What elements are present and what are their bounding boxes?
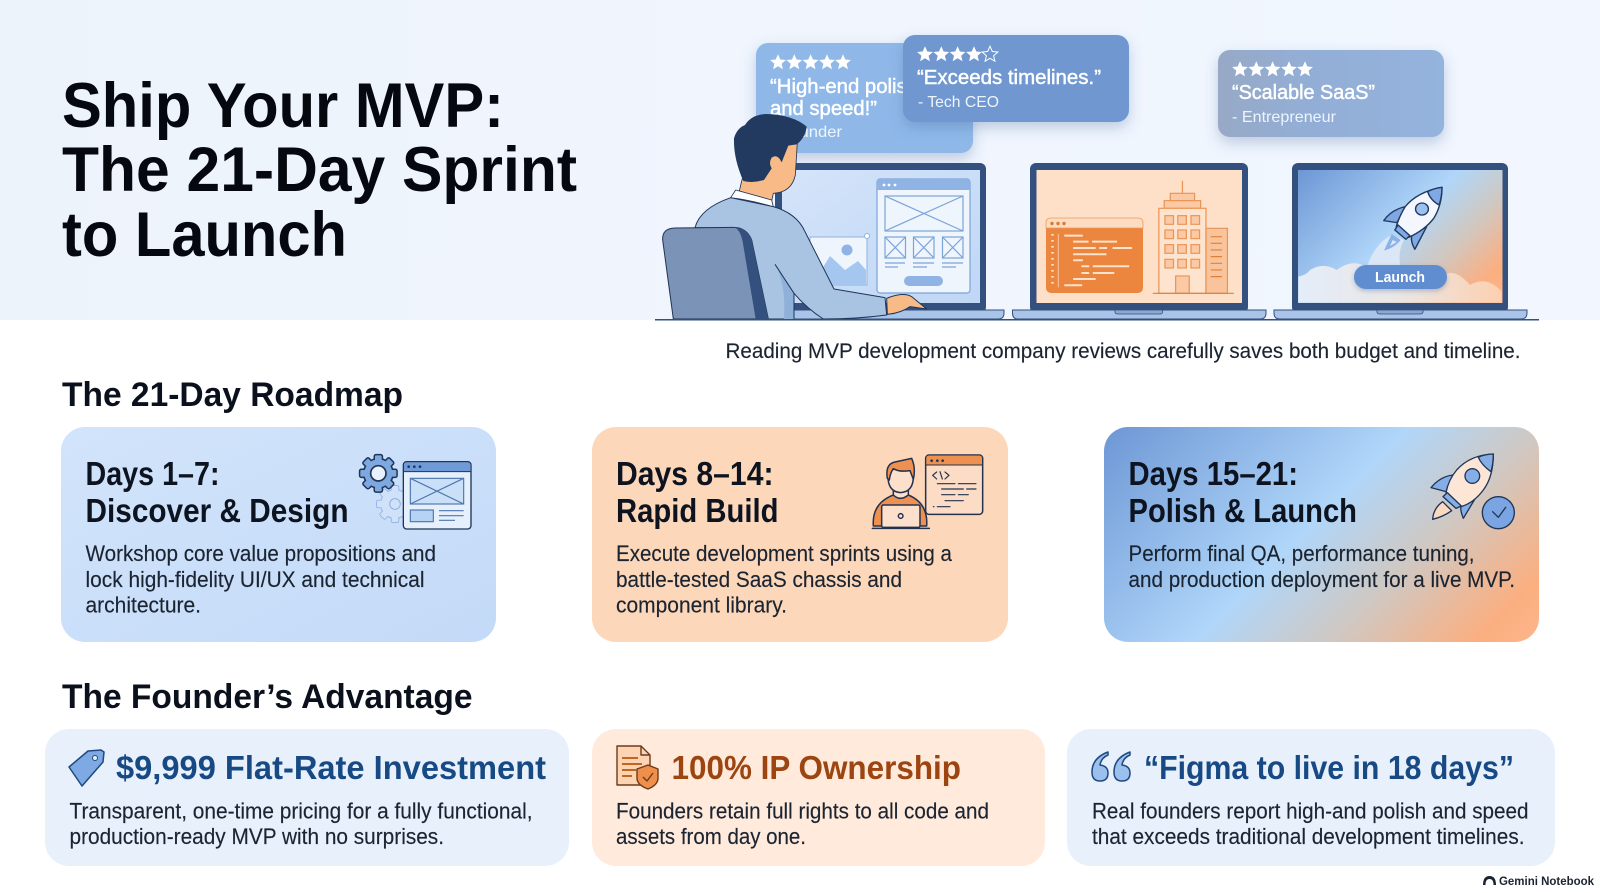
body text: component library. bbox=[616, 592, 787, 618]
body text: battle-tested SaaS chassis and bbox=[616, 567, 902, 592]
body text: lock high-fidelity UI/UX and technical bbox=[86, 567, 424, 592]
title: to Launch bbox=[62, 200, 347, 270]
body text bbox=[1092, 798, 1528, 849]
icon: developer with code window bbox=[872, 455, 983, 528]
ground line bbox=[655, 319, 1539, 320]
heading: 100% IP Ownership bbox=[672, 749, 961, 786]
body text: production-ready MVP with no surprises. bbox=[70, 824, 444, 849]
heading bbox=[616, 455, 778, 529]
review card: scalable SaaS bbox=[1218, 50, 1444, 137]
watermark: Gemini Notebook: Gemini Notebook bbox=[1499, 874, 1594, 888]
review card: exceeds timelines bbox=[903, 35, 1129, 122]
laptop 2: code and building bbox=[1012, 163, 1266, 319]
heading: “Figma to live in 18 days” bbox=[1144, 749, 1514, 786]
heading: Rapid Build bbox=[616, 492, 778, 529]
review card: high-end polish bbox=[756, 43, 973, 153]
review card: scalable SaaS: - Entrepreneur bbox=[1232, 109, 1337, 126]
panel: flat-rate investment bbox=[45, 729, 569, 866]
body text: Workshop core value propositions and bbox=[86, 541, 436, 566]
chair bbox=[663, 227, 768, 319]
body text bbox=[1128, 541, 1515, 592]
hand bbox=[887, 295, 927, 314]
heading bbox=[1128, 455, 1357, 529]
body text: that exceeds traditional development timelines. bbox=[1092, 824, 1524, 849]
body text: and production deployment for a live MVP. bbox=[1128, 567, 1515, 592]
code window bbox=[1046, 218, 1143, 293]
body text: Perform final QA, performance tuning, bbox=[1128, 541, 1474, 566]
panel: days 8-14 bbox=[592, 427, 1008, 642]
body text: assets from day one. bbox=[616, 824, 806, 849]
hero background bbox=[0, 0, 1600, 320]
person at desk bbox=[663, 114, 927, 319]
review card: high-end polish: and speed!” bbox=[770, 98, 877, 120]
body text bbox=[70, 798, 532, 849]
title bbox=[62, 71, 577, 270]
review card: exceeds timelines: “Exceeds timelines.” bbox=[917, 67, 1101, 89]
launch button bbox=[1354, 265, 1447, 289]
icon: rocket with check badge bbox=[1431, 454, 1514, 529]
body text bbox=[616, 541, 953, 618]
heading bbox=[86, 455, 348, 529]
heading: Discover & Design bbox=[86, 492, 348, 529]
section heading: roadmap: The 21-Day Roadmap bbox=[62, 376, 403, 414]
review card: high-end polish: - Founder bbox=[770, 124, 843, 141]
heading: Days 15–21: bbox=[1128, 455, 1298, 492]
clouds and smoke plume bbox=[1298, 234, 1502, 303]
heading: Days 8–14: bbox=[616, 455, 774, 492]
laptop 3: launch bbox=[1274, 163, 1527, 319]
title: Ship Your MVP: bbox=[62, 71, 504, 141]
body text: architecture. bbox=[86, 592, 201, 618]
office building bbox=[1153, 181, 1234, 293]
section heading: advantage: The Founder’s Advantage bbox=[62, 678, 472, 716]
head and neck bbox=[739, 130, 797, 201]
heading: Days 1–7: bbox=[86, 455, 220, 492]
body text: Transparent, one-time pricing for a fully functional, bbox=[70, 798, 532, 824]
review card: high-end polish: “High-end polish bbox=[770, 76, 918, 98]
torso and arm bbox=[695, 198, 887, 319]
body text bbox=[86, 541, 436, 618]
review card: exceeds timelines: - Tech CEO bbox=[918, 94, 999, 111]
panel: days 15-21 bbox=[1104, 427, 1539, 642]
laptop 1: wireframe design bbox=[775, 163, 1004, 319]
collar bbox=[731, 190, 773, 207]
icon: document with shield bbox=[617, 746, 658, 789]
panel: days 1-7 bbox=[61, 427, 496, 642]
tagline: Reading MVP development company reviews carefully saves both budget and timeline. bbox=[726, 339, 1520, 363]
panel: IP ownership bbox=[592, 729, 1045, 866]
wireframe window bbox=[877, 179, 970, 293]
rocket bbox=[1384, 187, 1442, 249]
icon: gears and wireframe window bbox=[360, 455, 471, 529]
icon: quote marks bbox=[1092, 752, 1130, 781]
panel: testimonial bbox=[1067, 729, 1555, 866]
review card: scalable SaaS: “Scalable SaaS” bbox=[1232, 82, 1375, 104]
title: The 21-Day Sprint bbox=[62, 135, 577, 205]
body text bbox=[616, 798, 989, 849]
launch button: Launch bbox=[1375, 269, 1425, 286]
body text: Founders retain full rights to all code and bbox=[616, 798, 989, 824]
heading: $9,999 Flat-Rate Investment bbox=[116, 749, 546, 786]
hair bbox=[734, 114, 807, 182]
image placeholder card bbox=[810, 234, 870, 285]
heading: Polish & Launch bbox=[1128, 492, 1357, 529]
body text: Real founders report high-and polish and speed bbox=[1092, 798, 1528, 824]
icon: price tag bbox=[69, 750, 104, 786]
body text: Execute development sprints using a bbox=[616, 541, 953, 566]
